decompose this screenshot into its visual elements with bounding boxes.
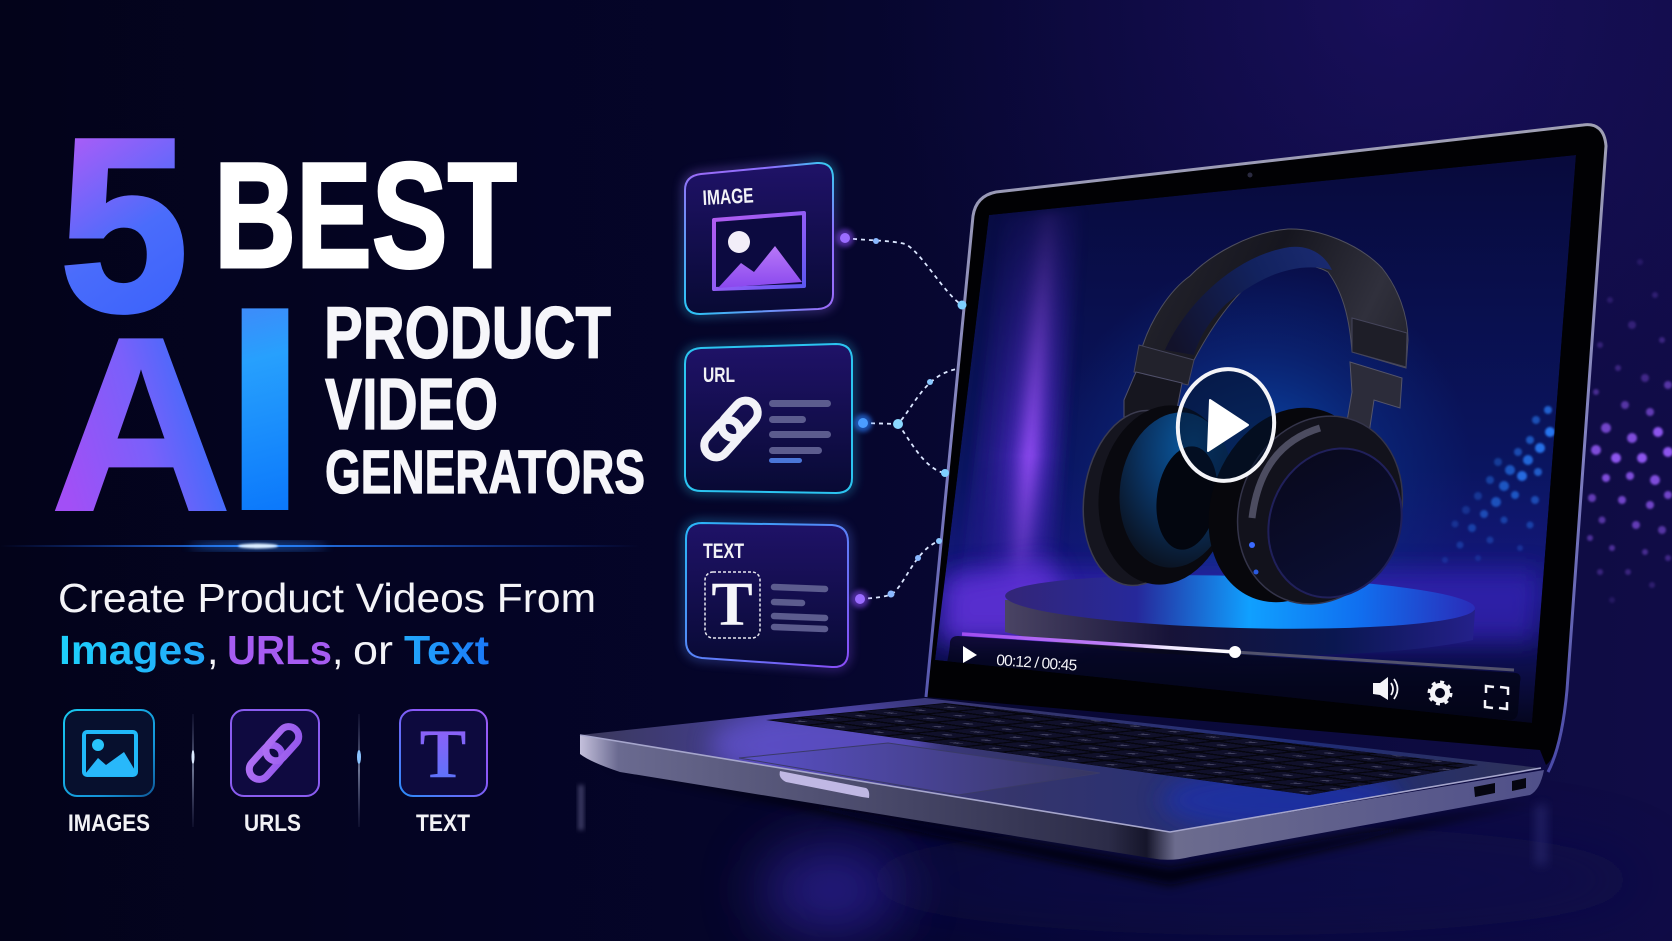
settings control xyxy=(1429,682,1451,704)
tile labels: IMAGES xyxy=(68,810,150,837)
icon tile: urls xyxy=(231,710,319,796)
connector: image to laptop xyxy=(836,229,966,310)
link icon xyxy=(699,396,763,462)
trackpad xyxy=(739,743,1100,795)
background particles right xyxy=(1587,259,1672,603)
webcam xyxy=(1248,172,1252,178)
subtitle: or xyxy=(353,627,393,673)
screen xyxy=(935,155,1576,723)
subtitle: Create Product Videos From xyxy=(58,575,596,621)
video control bar xyxy=(945,634,1520,720)
card label: URL xyxy=(703,364,735,387)
subtitle: URLs xyxy=(227,627,332,673)
input card: image xyxy=(685,163,833,314)
laptop lid xyxy=(926,125,1606,765)
purple curtain xyxy=(968,210,1076,578)
title: 5: 5 xyxy=(60,88,188,363)
title: AI: A xyxy=(50,285,232,563)
fullscreen control xyxy=(1485,686,1508,709)
serif T: T xyxy=(711,571,753,639)
icon tile: text xyxy=(400,710,487,796)
connector: url to laptop xyxy=(854,369,957,477)
dashed T box xyxy=(705,572,760,638)
connector: text to laptop xyxy=(851,538,942,608)
headband xyxy=(1136,229,1408,372)
progress track xyxy=(1235,652,1514,670)
laptop base xyxy=(580,698,1544,860)
card label: IMAGE xyxy=(702,184,754,210)
input card: url xyxy=(685,344,852,493)
tile labels: URLS xyxy=(244,810,301,837)
tile dividers xyxy=(192,714,361,827)
card label: TEXT xyxy=(703,540,744,563)
lid edge highlight xyxy=(926,125,1606,772)
text lines xyxy=(769,400,831,463)
particles in screen xyxy=(1442,406,1555,563)
left ear cup xyxy=(1082,410,1150,586)
screen floor glow xyxy=(940,570,1540,640)
subtitle: Images xyxy=(59,627,206,673)
timestamp: 00:12 / 00:45 xyxy=(996,652,1078,675)
title: AI: I xyxy=(220,246,310,573)
subtitle: , xyxy=(207,627,218,673)
subtitle xyxy=(58,575,596,673)
laptop xyxy=(580,125,1606,860)
title: PRODUCT VIDEO GENERATORS: VIDEO xyxy=(325,365,498,445)
pedestal xyxy=(1004,570,1476,656)
text lines xyxy=(774,587,825,629)
tile labels: TEXT xyxy=(416,810,470,837)
right ear cup xyxy=(1208,408,1334,602)
title: PRODUCT VIDEO GENERATORS: PRODUCT xyxy=(324,293,611,374)
subtitle: , xyxy=(332,627,343,673)
keyboard xyxy=(766,703,1478,795)
title: BEST: BEST xyxy=(214,131,517,299)
icon tile: text: T xyxy=(420,716,466,793)
play control xyxy=(963,646,977,663)
progress played xyxy=(962,634,1235,652)
glowing divider line xyxy=(0,543,640,549)
icon tile: images xyxy=(64,710,154,796)
sliders xyxy=(1134,345,1194,385)
picture frame icon xyxy=(714,213,804,289)
ports xyxy=(1474,778,1526,797)
reflection under laptop xyxy=(578,765,1547,935)
headphones xyxy=(1082,228,1408,605)
title: PRODUCT VIDEO GENERATORS: GENERATORS xyxy=(325,438,645,506)
trackpad notch xyxy=(780,771,869,798)
title: AI xyxy=(50,246,310,573)
subtitle: Text xyxy=(404,627,489,673)
title: PRODUCT VIDEO GENERATORS xyxy=(324,293,645,506)
volume control xyxy=(1373,677,1398,700)
tile labels xyxy=(68,810,470,837)
input card: text xyxy=(686,523,848,667)
progress knob xyxy=(1229,646,1241,658)
play button xyxy=(1176,367,1276,483)
